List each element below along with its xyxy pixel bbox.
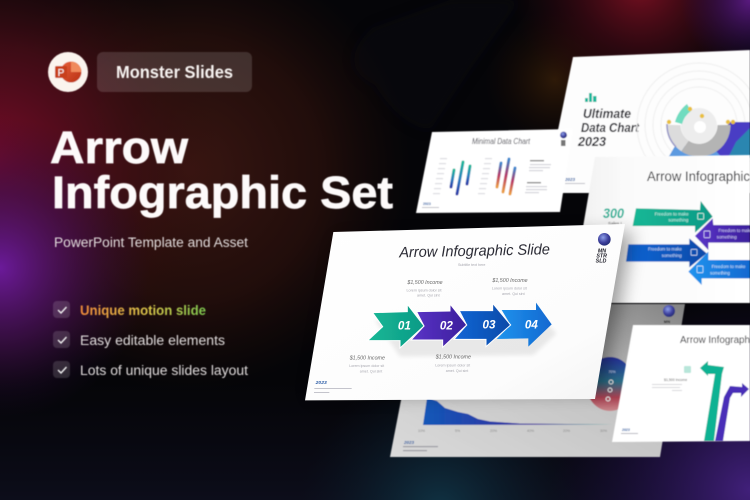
- arrow: blue right: Freedom to make: [648, 247, 683, 252]
- arrows: [626, 201, 750, 285]
- footer: [314, 380, 352, 393]
- footer note: [564, 177, 585, 184]
- panel: arrow infographic slide (lower right): [612, 325, 750, 442]
- footer: [422, 202, 439, 208]
- axis labels: 20%: [563, 429, 570, 433]
- axis labels: 20%: [490, 429, 497, 433]
- slide heading: Arrow Infographic: [647, 169, 750, 184]
- brand pill: Monster Slides: [97, 52, 252, 92]
- income note: top left: [406, 280, 443, 298]
- income note: bottom centre: [435, 355, 471, 373]
- income note: bottom centre: Lorem ipsum dolor sit: [435, 363, 470, 367]
- panel: ultimate data chart slide: [558, 50, 750, 193]
- arrow: blue right: something: [662, 253, 682, 258]
- axis labels: 5%: [455, 429, 460, 433]
- arrow: teal right: something: [668, 218, 689, 223]
- income note: bottom centre: $1,500 Income: [435, 355, 471, 361]
- radial chart: [636, 66, 750, 158]
- feature: lots of unique slides layout: Lots of unique slides layout: [80, 363, 248, 378]
- arrow: blue right: [626, 238, 707, 267]
- arrow 01: 01: [398, 320, 411, 333]
- panel: main arrow infographic slide: [305, 224, 632, 400]
- arrow: light blue left: [688, 252, 750, 285]
- arrow shadow: [375, 317, 557, 357]
- income note: bottom left: $1,500 Income: [349, 355, 385, 361]
- footer note: 2023: [564, 177, 576, 182]
- subtitle: PowerPoint Template and Asset: [54, 235, 248, 250]
- heading: ultimate data chart 2023: Ultimate: [583, 106, 631, 121]
- income note: top right: [491, 278, 528, 296]
- arrow: teal right: Freedom to make: [655, 211, 689, 216]
- arrow: light blue left: Freedom to make: [712, 264, 746, 269]
- income note: top right: amet. Qui sint: [502, 292, 525, 296]
- icon: bar chart: [585, 93, 596, 102]
- income note: bottom centre: amet. Qui sint: [446, 369, 468, 373]
- logo: MN STR SLD: [596, 233, 611, 264]
- arrow 02: [411, 304, 467, 347]
- income note: top left: amet. Qui sint: [417, 294, 440, 298]
- title: Infographic Set: [52, 167, 393, 218]
- brand pill: Monster Slides: Monster Slides: [116, 62, 233, 82]
- panel: minimal data chart slide: [416, 129, 573, 213]
- footer: [403, 440, 438, 451]
- arrow: teal right: [633, 201, 713, 233]
- arrow: teal up left: [700, 361, 724, 441]
- bar chart: right group: [497, 159, 515, 194]
- slide subtitle: Subtitle text here: [458, 263, 485, 267]
- income note: top right: $1,500 Income: [491, 278, 528, 284]
- panel: arrow infographic slide (right): [570, 155, 750, 303]
- stat: 300 sales: Sales !: [608, 221, 622, 226]
- arrow: purple left: [695, 218, 750, 250]
- feature: easy editable elements: Easy editable elements: [80, 333, 225, 348]
- income note: bottom left: Lorem ipsum dolor sit: [349, 364, 384, 368]
- arrow 04: [497, 303, 552, 347]
- footer: 2023: [423, 202, 431, 206]
- income note: top left: Lorem ipsum dolor sit: [407, 288, 441, 292]
- brand logo: PowerPoint icon: [48, 52, 88, 92]
- stat: 300 sales: 300: [603, 205, 624, 221]
- title: [50, 122, 393, 218]
- logo ball: [663, 305, 675, 324]
- income note: top right: Lorem ipsum dolor sit: [492, 287, 527, 291]
- area chart: [423, 398, 613, 425]
- axis labels: [433, 158, 492, 194]
- arrows: [700, 361, 749, 441]
- income note: bottom left: amet. Qui sint: [360, 370, 382, 374]
- heading: ultimate data chart 2023: 2023: [577, 134, 607, 149]
- logo: MN STR SLD: STR: [596, 253, 607, 259]
- arrow: purple left: something: [717, 234, 737, 239]
- logo: MN STR SLD: MN: [598, 248, 606, 254]
- heading: ultimate data chart 2023: [577, 106, 640, 149]
- arrow 04: 04: [525, 318, 538, 331]
- logo ball: MN: [664, 319, 670, 324]
- bar chart: left group: [451, 162, 470, 194]
- logo ball: [560, 132, 567, 146]
- arrow: light blue left: something: [710, 270, 731, 275]
- footer: 2023: [621, 428, 630, 432]
- axis labels: 40%: [527, 429, 534, 433]
- arrow 01: [368, 304, 424, 348]
- side notes: [525, 160, 551, 193]
- footer: 2023: [403, 440, 415, 445]
- income note: top left: $1,500 Income: [406, 280, 443, 286]
- arrow 02: 02: [440, 319, 453, 332]
- logo: MN STR SLD: SLD: [596, 258, 606, 264]
- heading: ultimate data chart 2023: Data Chart: [581, 120, 640, 135]
- footer: 2023: [315, 380, 327, 386]
- arrow: purple up right: [715, 383, 749, 441]
- icon: calendar: [684, 366, 691, 373]
- feature: unique motion slide: Unique motion slide: [80, 303, 206, 318]
- panel: area chart slide: [390, 304, 685, 457]
- feature list: [53, 301, 248, 378]
- slide heading: Minimal Data Chart: [472, 136, 531, 146]
- donut chart: 70%: [608, 370, 616, 374]
- slide heading: Arrow Infographic Slide: [398, 241, 550, 261]
- brand logo: PowerPoint icon: P: [58, 68, 65, 79]
- slide heading: Arrow Infograph: [680, 335, 750, 346]
- axis labels: 30%: [600, 429, 607, 433]
- income note: $1,500 Income: [664, 378, 687, 382]
- income note: bottom left: [349, 355, 385, 374]
- axis labels: [418, 429, 607, 433]
- arrow 03: 03: [483, 319, 496, 332]
- arrow 03: [454, 303, 511, 347]
- donut chart: [586, 357, 634, 411]
- title: Arrow: [50, 122, 189, 173]
- axis labels: 10%: [418, 429, 425, 433]
